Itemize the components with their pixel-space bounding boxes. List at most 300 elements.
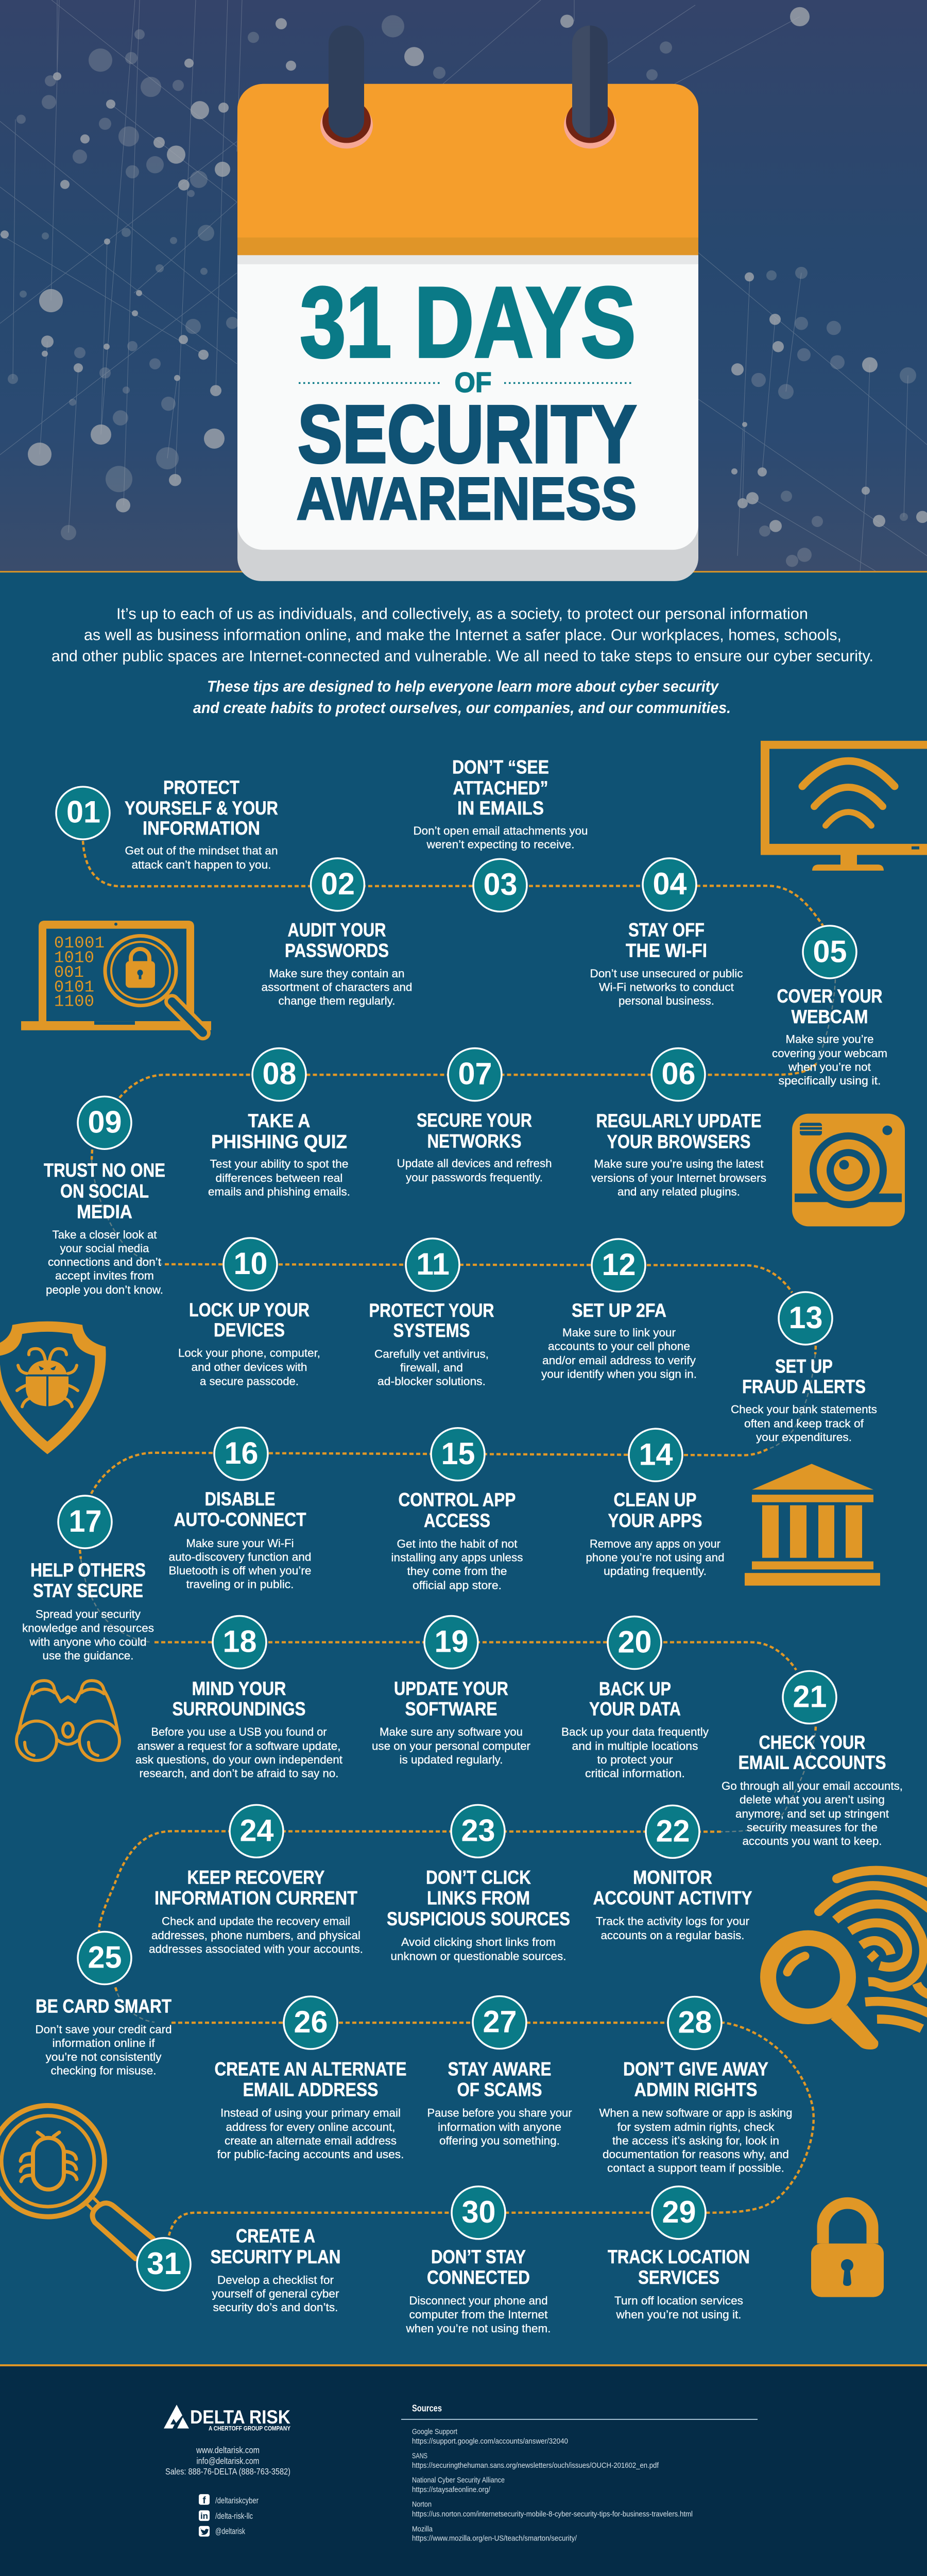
heading 16 — [174, 1488, 306, 1530]
icon: shield with bug — [0, 1321, 106, 1454]
description 03: weren’t expecting to receive. — [426, 838, 575, 851]
heading 01: INFORMATION — [143, 818, 260, 839]
icon: camera — [792, 1114, 905, 1226]
description 10 — [178, 1347, 320, 1387]
icon: bank building — [745, 1464, 880, 1586]
description 16: Bluetooth is off when you’re — [169, 1564, 312, 1577]
heading 21: EMAIL ACCOUNTS — [739, 1752, 886, 1773]
badge 12 — [592, 1239, 645, 1292]
description 20: critical information. — [585, 1767, 685, 1780]
description 13 — [731, 1403, 877, 1444]
description 04: Don’t use unsecured or public — [590, 967, 743, 980]
description 22: accounts on a regular basis. — [600, 1929, 745, 1942]
badge 11 — [406, 1239, 459, 1291]
step 02 — [262, 858, 412, 1007]
description 14: Remove any apps on your — [590, 1537, 721, 1550]
heading 13: FRAUD ALERTS — [742, 1376, 866, 1397]
heading 15 — [399, 1489, 516, 1531]
description 18 — [135, 1725, 343, 1780]
sources list: https://support.google.com/accounts/answer/32040 — [412, 2437, 568, 2446]
heading 12: SET UP 2FA — [572, 1299, 666, 1321]
description 19: Make sure any software you — [380, 1725, 523, 1738]
heading 20: BACK UP — [599, 1678, 671, 1699]
calendar orange shade — [237, 238, 698, 255]
step 21 — [722, 1671, 903, 1848]
badge 08 — [252, 1048, 306, 1101]
description 09: people you don’t know. — [46, 1283, 163, 1296]
heading 09: TRUST NO ONE — [44, 1160, 165, 1181]
heading 02: PASSWORDS — [285, 940, 389, 961]
step 04 — [590, 858, 743, 1007]
heading 07: NETWORKS — [427, 1130, 522, 1151]
badge 17 — [58, 1496, 112, 1548]
sources list: https://us.norton.com/internetsecurity-mobile-8-cyber-security-tips-for-business-travelers.html — [412, 2510, 693, 2518]
heading 27: STAY AWARE — [448, 2058, 551, 2079]
heading 04: STAY OFF — [628, 919, 705, 940]
badge 03 — [473, 859, 527, 911]
step 24 — [149, 1805, 363, 1956]
step 07 — [397, 1048, 552, 1184]
heading 13 — [742, 1355, 866, 1397]
description 07: your passwords frequently. — [406, 1171, 543, 1184]
description 31: yourself of general cyber — [212, 2287, 339, 2300]
description 16: Make sure your Wi-Fi — [186, 1537, 294, 1550]
heading 06: YOUR BROWSERS — [607, 1131, 751, 1152]
badge 07: 07 — [458, 1056, 492, 1091]
description 04: Wi-Fi networks to conduct — [599, 980, 734, 993]
description 23: unknown or questionable sources. — [390, 1950, 566, 1962]
step 23 — [387, 1805, 570, 1962]
intro text — [52, 605, 873, 717]
description 13: Check your bank statements — [731, 1403, 877, 1416]
heading 02: AUDIT YOUR — [287, 919, 386, 940]
description 21: security measures for the — [747, 1821, 878, 1834]
left binding hole and ring — [320, 26, 373, 148]
heading 30 — [427, 2246, 530, 2288]
heading 03 — [452, 756, 549, 819]
description 30 — [405, 2294, 551, 2335]
description 12: your identify when you sign in. — [541, 1368, 697, 1381]
description 05 — [772, 1033, 887, 1087]
social: twitter: @deltarisk — [215, 2527, 245, 2536]
badge 22 — [646, 1805, 699, 1858]
description 20: and in multiple locations — [572, 1740, 698, 1752]
heading 28 — [623, 2058, 768, 2100]
heading 31 — [211, 2225, 341, 2267]
step 15 — [391, 1428, 523, 1591]
intro text: and create habits to protect ourselves, our companies, and our communities. — [193, 699, 731, 717]
sources list: SANS — [412, 2452, 427, 2460]
heading 22: MONITOR — [633, 1867, 712, 1888]
badge 29: 29 — [662, 2194, 696, 2229]
dashed timeline path — [80, 841, 835, 2238]
description 11 — [374, 1348, 489, 1387]
description 12: accounts to your cell phone — [548, 1340, 690, 1353]
description 14: updating frequently. — [604, 1565, 707, 1578]
description 19 — [372, 1725, 531, 1766]
description 19: is updated regularly. — [400, 1753, 503, 1766]
heading 19 — [394, 1677, 508, 1720]
step 16 — [169, 1428, 312, 1591]
icon: laptop with magnifier and lock: 1100 — [54, 993, 94, 1011]
description 31 — [212, 2274, 339, 2314]
heading 18 — [173, 1677, 306, 1720]
title: AWARENESS — [297, 465, 637, 532]
badge 11: 11 — [416, 1247, 450, 1281]
sources heading: Sources — [412, 2402, 442, 2413]
heading 02 — [285, 919, 389, 961]
heading 07 — [417, 1109, 532, 1151]
calendar grey fold — [237, 255, 698, 264]
description 17: knowledge and resources — [22, 1622, 154, 1634]
step 14 — [586, 1429, 725, 1578]
contact details: info@deltarisk.com — [197, 2455, 260, 2466]
heading 18: SURROUNDINGS — [173, 1698, 306, 1720]
description 15: installing any apps unless — [391, 1551, 523, 1564]
title — [297, 266, 637, 532]
icon: laptop with magnifier and lock: 1010 — [54, 949, 94, 967]
description 04: personal business. — [619, 994, 714, 1007]
heading 23 — [387, 1867, 570, 1929]
description 03 — [413, 824, 588, 851]
icon: binoculars — [16, 1681, 119, 1760]
heading 01: PROTECT — [163, 776, 239, 798]
heading 26: EMAIL ADDRESS — [243, 2079, 378, 2100]
description 01: attack can’t happen to you. — [132, 858, 271, 871]
heading 06: REGULARLY UPDATE — [596, 1110, 762, 1131]
description 26: Instead of using your primary email — [220, 2107, 401, 2119]
description 13: your expenditures. — [756, 1431, 852, 1444]
badge 27: 27 — [483, 2004, 517, 2039]
description 27: information with anyone — [438, 2121, 561, 2133]
badge 16 — [214, 1428, 268, 1480]
badge 09 — [78, 1096, 131, 1149]
description 28: documentation for reasons why, and — [603, 2148, 789, 2161]
step 17 — [22, 1496, 154, 1662]
description 30: computer from the Internet — [409, 2308, 548, 2321]
social: facebook: f — [202, 2495, 206, 2505]
heading 01: YOURSELF & YOUR — [125, 797, 278, 819]
description 22 — [596, 1915, 750, 1942]
description 04 — [590, 967, 743, 1007]
heading 09: ON SOCIAL — [60, 1180, 149, 1201]
heading 11: PROTECT YOUR — [369, 1299, 494, 1321]
badge 10: 10 — [233, 1246, 267, 1281]
step 18 — [135, 1616, 343, 1780]
badge 15: 15 — [441, 1436, 475, 1471]
heading 05 — [777, 985, 883, 1027]
heading 07: SECURE YOUR — [417, 1109, 532, 1131]
intro text: These tips are designed to help everyone learn more about cyber security — [207, 677, 719, 696]
badge 05 — [803, 926, 856, 978]
heading 11: SYSTEMS — [393, 1319, 470, 1341]
description 15: Get into the habit of not — [397, 1537, 518, 1550]
step 30 — [405, 2187, 551, 2335]
description 12 — [541, 1326, 697, 1381]
badge 18: 18 — [222, 1624, 257, 1659]
description 17: Spread your security — [36, 1608, 141, 1620]
description 28: When a new software or app is asking — [599, 2107, 792, 2119]
description 06: Make sure you’re using the latest — [594, 1158, 764, 1171]
heading 03: DON’T “SEE — [452, 756, 549, 777]
step 06 — [591, 1048, 766, 1198]
description 29: when you’re not using it. — [615, 2308, 742, 2321]
heading 05: COVER YOUR — [777, 985, 883, 1007]
social: linkedin: in — [200, 2511, 208, 2521]
badge 14 — [629, 1429, 682, 1481]
social: linkedin — [199, 2510, 253, 2521]
sources list: Mozilla — [412, 2525, 433, 2534]
heading 30: DON’T STAY — [431, 2246, 526, 2267]
heading 29: SERVICES — [638, 2266, 719, 2288]
badge 25 — [78, 1932, 131, 1985]
description 17: with anyone who could — [29, 1636, 146, 1648]
badge 05: 05 — [813, 934, 847, 969]
sources list: National Cyber Security Alliance — [412, 2476, 505, 2485]
badge 13 — [779, 1292, 832, 1345]
description 18: ask questions, do your own independent — [135, 1753, 343, 1766]
description 12: Make sure to link your — [562, 1326, 676, 1339]
heading 17: STAY SECURE — [33, 1580, 143, 1601]
icon: magnifier with bug — [0, 2106, 153, 2259]
description 08 — [208, 1158, 350, 1198]
description 15: they come from the — [407, 1565, 507, 1578]
description 25: you’re not consistently — [46, 2050, 162, 2063]
description 11: Carefully vet antivirus, — [374, 1348, 489, 1360]
description 25: checking for misuse. — [51, 2064, 157, 2077]
heading 18: MIND YOUR — [192, 1677, 286, 1699]
badge 18 — [213, 1616, 266, 1669]
heading 03: ATTACHED” — [453, 777, 548, 799]
badge 25: 25 — [88, 1940, 122, 1975]
logo: Delta Risk: A CHERTOFF GROUP COMPANY — [209, 2425, 291, 2432]
description 16 — [169, 1537, 312, 1591]
badge 01 — [56, 787, 110, 839]
panel: footer — [0, 2364, 927, 2576]
heading 04: THE WI-FI — [626, 940, 707, 961]
description 15: official app store. — [413, 1579, 502, 1591]
heading 14: CLEAN UP — [614, 1489, 697, 1511]
badge 07 — [448, 1048, 502, 1101]
description 02: assortment of characters and — [262, 980, 412, 993]
badge 28 — [668, 1997, 722, 2049]
icon: laptop with magnifier and lock: 0101 — [54, 978, 94, 996]
description 30: when you’re not using them. — [405, 2322, 551, 2335]
icon: laptop with magnifier and lock: 001 — [54, 963, 84, 982]
description 27: Pause before you share your — [427, 2107, 572, 2119]
description 23: Avoid clicking short links from — [401, 1936, 556, 1948]
description 05: when you’re not — [788, 1060, 871, 1073]
social: facebook — [199, 2494, 259, 2505]
calendar white page — [237, 252, 698, 550]
sources list: https://www.mozilla.org/en-US/teach/smarton/security/ — [412, 2534, 577, 2543]
description 21: delete what you aren’t using — [740, 1793, 885, 1806]
description 12: and/or email address to verify — [542, 1354, 696, 1367]
sources list — [412, 2428, 693, 2543]
description 09: Take a closer look at — [52, 1228, 157, 1241]
badge 17: 17 — [69, 1504, 101, 1538]
description 26: for public-facing accounts and uses. — [217, 2148, 404, 2161]
contact details — [165, 2445, 290, 2477]
heading 21: CHECK YOUR — [759, 1732, 865, 1753]
heading 26: CREATE AN ALTERNATE — [214, 2058, 407, 2079]
badge 02 — [311, 858, 365, 911]
heading 08: TAKE A — [248, 1110, 311, 1131]
sources list: Norton — [412, 2500, 432, 2509]
description 21: Go through all your email accounts, — [722, 1780, 903, 1792]
logo: Delta Risk: DELTA RISK — [190, 2406, 290, 2428]
heading 22: ACCOUNT ACTIVITY — [593, 1887, 752, 1908]
badge 16: 16 — [225, 1435, 259, 1470]
description 26: address for every online account, — [226, 2121, 395, 2133]
heading 23: SUSPICIOUS SOURCES — [387, 1908, 570, 1929]
description 21: accounts you want to keep. — [743, 1835, 882, 1848]
description 11: ad-blocker solutions. — [377, 1375, 486, 1387]
description 05: covering your webcam — [772, 1047, 887, 1060]
description 31: Develop a checklist for — [217, 2274, 334, 2286]
description 18: research, and don’t be afraid to say no. — [139, 1767, 339, 1780]
badge 31: 31 — [147, 2246, 181, 2281]
badge 22: 22 — [656, 1814, 690, 1848]
description 28: for system admin rights, check — [617, 2121, 775, 2133]
step 19 — [372, 1616, 531, 1766]
social: twitter — [199, 2526, 245, 2536]
description 14 — [586, 1537, 725, 1578]
icon: laptop with magnifier and lock: 01001 — [54, 934, 105, 953]
heading 29 — [608, 2246, 750, 2288]
heading 10 — [189, 1299, 310, 1341]
description 24 — [149, 1915, 363, 1956]
heading 30: CONNECTED — [427, 2266, 530, 2288]
description 02: change them regularly. — [278, 994, 396, 1007]
social: linkedin: /delta-risk-llc — [215, 2511, 253, 2521]
badge 01: 01 — [66, 794, 100, 829]
description 10: and other devices with — [192, 1361, 307, 1374]
icon: fingerprint with magnifier — [768, 1870, 927, 2049]
step 28 — [599, 1997, 792, 2174]
icon: laptop with magnifier and lock — [21, 921, 211, 1033]
heading 03: IN EMAILS — [457, 797, 544, 819]
badge 23: 23 — [461, 1813, 495, 1848]
heading 06 — [596, 1110, 761, 1152]
heading 01 — [125, 776, 278, 839]
heading 25: BE CARD SMART — [36, 1995, 171, 2016]
step 29 — [608, 2187, 750, 2321]
step 01 — [56, 776, 278, 871]
description 18: answer a request for a software update, — [137, 1740, 340, 1752]
description 06: versions of your Internet browsers — [591, 1172, 766, 1184]
heading 23: DON’T CLICK — [426, 1867, 531, 1888]
description 01: Get out of the mindset that an — [125, 844, 278, 857]
heading 26 — [214, 2058, 407, 2100]
heading 09 — [44, 1160, 165, 1223]
description 27: offering you something. — [439, 2134, 560, 2147]
heading 31: SECURITY PLAN — [211, 2246, 341, 2267]
badge 19 — [424, 1616, 478, 1669]
heading 31: CREATE A — [236, 2225, 315, 2247]
description 25: Don’t save your credit card — [35, 2023, 171, 2036]
description 08: emails and phishing emails. — [208, 1185, 350, 1198]
badge 02: 02 — [321, 867, 355, 901]
heading 23: LINKS FROM — [427, 1887, 530, 1908]
step 10 — [178, 1238, 320, 1387]
description 24: Check and update the recovery email — [162, 1915, 350, 1928]
step 08 — [208, 1048, 350, 1198]
step 31 — [137, 2225, 341, 2314]
description 28: contact a support team if possible. — [607, 2162, 784, 2174]
description 07 — [397, 1157, 552, 1184]
badge 26: 26 — [294, 2005, 328, 2039]
description 19: use on your personal computer — [372, 1740, 531, 1752]
badge 15 — [431, 1428, 485, 1481]
description 11: firewall, and — [400, 1361, 463, 1374]
heading 17: HELP OTHERS — [30, 1559, 146, 1581]
description 17: use the guidance. — [42, 1649, 134, 1662]
description 09: accept invites from — [55, 1269, 154, 1282]
description 26: create an alternate email address — [225, 2134, 397, 2147]
heading 11 — [369, 1299, 494, 1341]
heading 20 — [589, 1678, 681, 1720]
icon: monitor with wifi — [761, 741, 927, 871]
description 13: often and keep track of — [744, 1417, 864, 1430]
badge 28: 28 — [678, 2005, 712, 2040]
step 26 — [214, 1996, 407, 2161]
contact details: Sales: 888-76-DELTA (888-763-3582) — [165, 2466, 290, 2477]
description 05: specifically using it. — [779, 1074, 881, 1087]
heading 24: KEEP RECOVERY — [187, 1867, 324, 1888]
badge 08: 08 — [262, 1056, 296, 1091]
heading 05: WEBCAM — [792, 1006, 868, 1027]
intro text: It’s up to each of us as individuals, and collectively, as a society, to protect our personal information — [116, 605, 808, 622]
badge 14: 14 — [639, 1437, 673, 1471]
badge 13: 13 — [788, 1300, 822, 1335]
description 16: traveling or in public. — [186, 1578, 294, 1591]
sources list: https://staysafeonline.org/ — [412, 2485, 491, 2494]
step 09 — [44, 1096, 165, 1296]
badge 19: 19 — [435, 1624, 469, 1659]
social: facebook: /deltariskcyber — [215, 2496, 259, 2505]
badge 26 — [284, 1996, 337, 2049]
step 27 — [427, 1996, 572, 2147]
calendar orange header — [237, 84, 698, 238]
badge 31 — [137, 2238, 191, 2291]
description 14: phone you’re not using and — [586, 1551, 725, 1564]
description 30: Disconnect your phone and — [409, 2294, 548, 2307]
heading 28: ADMIN RIGHTS — [634, 2079, 758, 2100]
description 26 — [217, 2107, 404, 2161]
description 17 — [22, 1608, 154, 1662]
heading 08 — [211, 1110, 347, 1152]
badge 21: 21 — [793, 1679, 827, 1714]
step 20 — [561, 1617, 709, 1780]
description 28 — [599, 2107, 792, 2174]
step 11 — [369, 1239, 494, 1387]
heading 19: SOFTWARE — [405, 1698, 497, 1720]
description 29 — [614, 2294, 743, 2321]
heading 19: UPDATE YOUR — [394, 1677, 508, 1699]
heading 21 — [739, 1732, 886, 1773]
description 03: Don’t open email attachments you — [413, 824, 588, 837]
heading 29: TRACK LOCATION — [608, 2246, 750, 2267]
badge 20: 20 — [618, 1624, 652, 1659]
badge 30: 30 — [461, 2194, 495, 2229]
sources list: https://securingthehuman.sans.org/newsletters/ouch/issues/OUCH-201602_en.pdf — [412, 2461, 659, 2470]
description 06: and any related plugins. — [617, 1185, 740, 1198]
icon: padlock — [811, 2203, 884, 2297]
badge 24 — [230, 1805, 283, 1857]
description 25: information online if — [52, 2037, 155, 2049]
contact details: www.deltarisk.com — [196, 2445, 260, 2455]
